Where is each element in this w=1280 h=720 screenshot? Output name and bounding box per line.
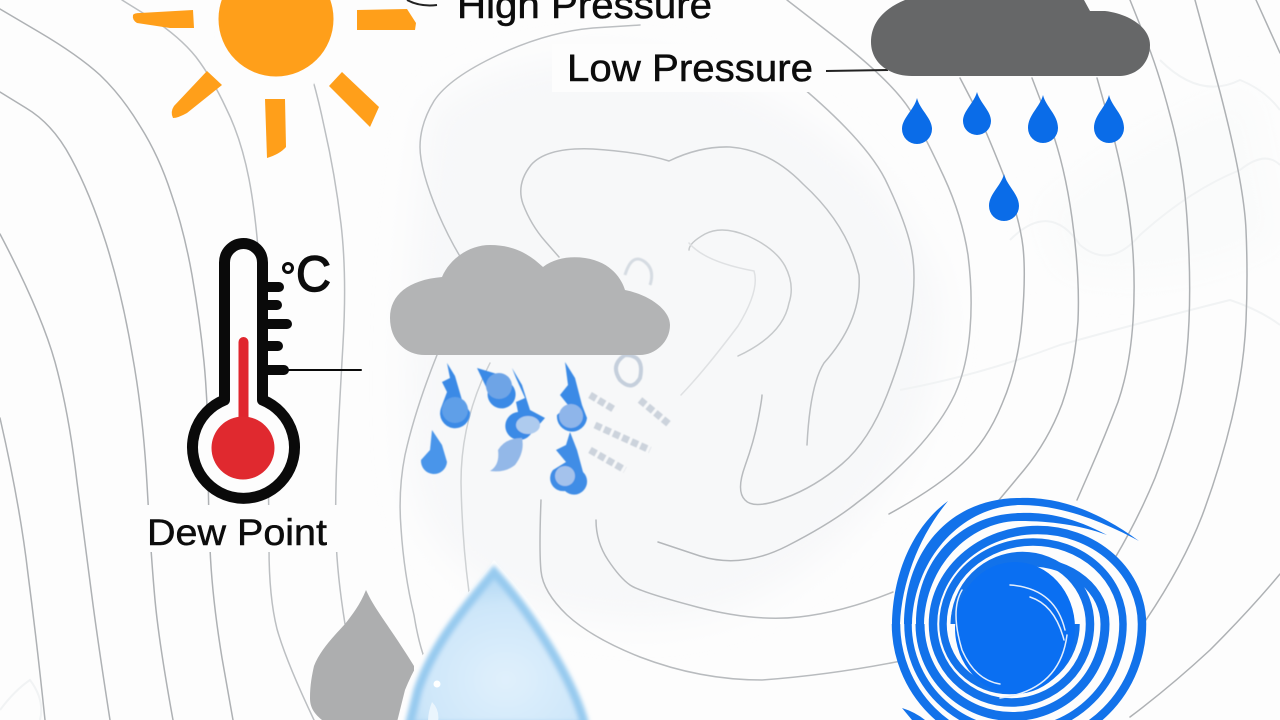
icon: blue rain drops xyxy=(902,92,1124,221)
icon: thermometer xyxy=(193,244,361,498)
icon: grey water drop xyxy=(310,590,414,720)
icon: blue spiral storm xyxy=(892,498,1142,720)
icon: sun (high pressure) xyxy=(133,0,416,158)
spiral tapered outer arms xyxy=(892,498,1139,720)
label: Dew Point: Dew Point xyxy=(147,512,328,553)
white gap behind the Dew Point label xyxy=(140,505,345,552)
spiral rings xyxy=(896,530,1142,720)
spiral core xyxy=(955,562,1075,694)
icon: dark rain cloud xyxy=(871,0,1150,76)
icon: thermometer: C xyxy=(296,246,331,302)
icon: light grey cloud xyxy=(390,245,670,355)
icon: faded sketch marks near the light cloud xyxy=(590,259,670,470)
label: Low Pressure: Low Pressure xyxy=(567,48,813,90)
spiral highlight streaks xyxy=(956,585,1067,698)
white halo around the sun xyxy=(214,0,338,97)
label: Low Pressure xyxy=(552,44,888,92)
icon: large light-blue water drop xyxy=(395,560,602,720)
icon: blue wet-precipitation streaks xyxy=(421,362,587,495)
